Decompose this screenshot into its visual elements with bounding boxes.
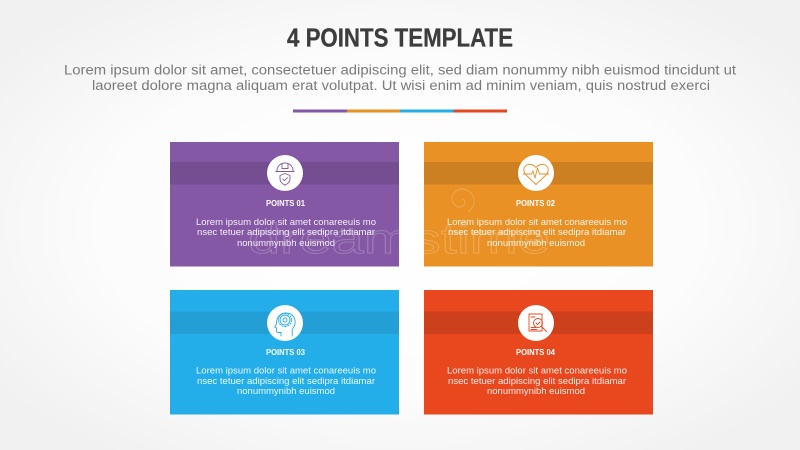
panel: points 01 — [170, 142, 399, 266]
description: points 01 — [196, 217, 376, 248]
description: points 03 — [196, 366, 376, 396]
description: points 03: nsec tetuer adipiscing elit sedipra itdiamar — [197, 376, 375, 386]
heading: points 03: POINTS 03 — [266, 348, 306, 357]
description: points 04 — [447, 366, 627, 396]
panel: points 03 — [170, 290, 399, 414]
watermark: dreamstime — [248, 215, 550, 262]
description: points 02: nsec tetuer adipiscing elit sedipra itdiamar — [448, 227, 626, 237]
description: points 03: Lorem ipsum dolor sit amet conareeuis mo — [196, 366, 376, 376]
colour divider bar — [293, 110, 507, 112]
description: points 01: nonummynibh euismod — [237, 238, 335, 248]
icon: head with gear — [275, 313, 295, 336]
description: points 04: nonummynibh euismod — [487, 386, 585, 396]
panel: points 02 — [424, 142, 653, 266]
intro text: Lorem ipsum dolor sit amet, consectetuer adipiscing elit, sed diam nonummy nibh euismod tincidunt ut — [64, 62, 736, 78]
description: points 04: Lorem ipsum dolor sit amet conareeuis mo — [447, 366, 627, 376]
description: points 04: nsec tetuer adipiscing elit sedipra itdiamar — [448, 376, 626, 386]
heading: points 01: POINTS 01 — [266, 199, 306, 208]
intro text — [64, 62, 736, 94]
panel: points 04 — [424, 290, 653, 414]
watermark — [248, 189, 550, 262]
description: points 02 — [447, 217, 627, 248]
heading: points 02: POINTS 02 — [516, 199, 556, 208]
description: points 01: Lorem ipsum dolor sit amet conareeuis mo — [196, 217, 376, 227]
icon: document with magnifier — [529, 314, 546, 332]
icon: helmet and shield — [276, 163, 294, 185]
icon: heart with pulse — [523, 164, 549, 184]
description: points 02: nonummynibh euismod — [487, 238, 585, 248]
description: points 02: Lorem ipsum dolor sit amet conareeuis mo — [447, 217, 627, 227]
title: 4 POINTS TEMPLATE — [287, 22, 513, 52]
description: points 03: nonummynibh euismod — [237, 386, 335, 396]
description: points 01: nsec tetuer adipiscing elit sedipra itdiamar — [197, 227, 375, 237]
intro text: laoreet dolore magna aliquam erat volutpat. Ut wisi enim ad minim veniam, quis nostrud exerci — [92, 78, 710, 94]
heading: points 04: POINTS 04 — [516, 348, 556, 357]
